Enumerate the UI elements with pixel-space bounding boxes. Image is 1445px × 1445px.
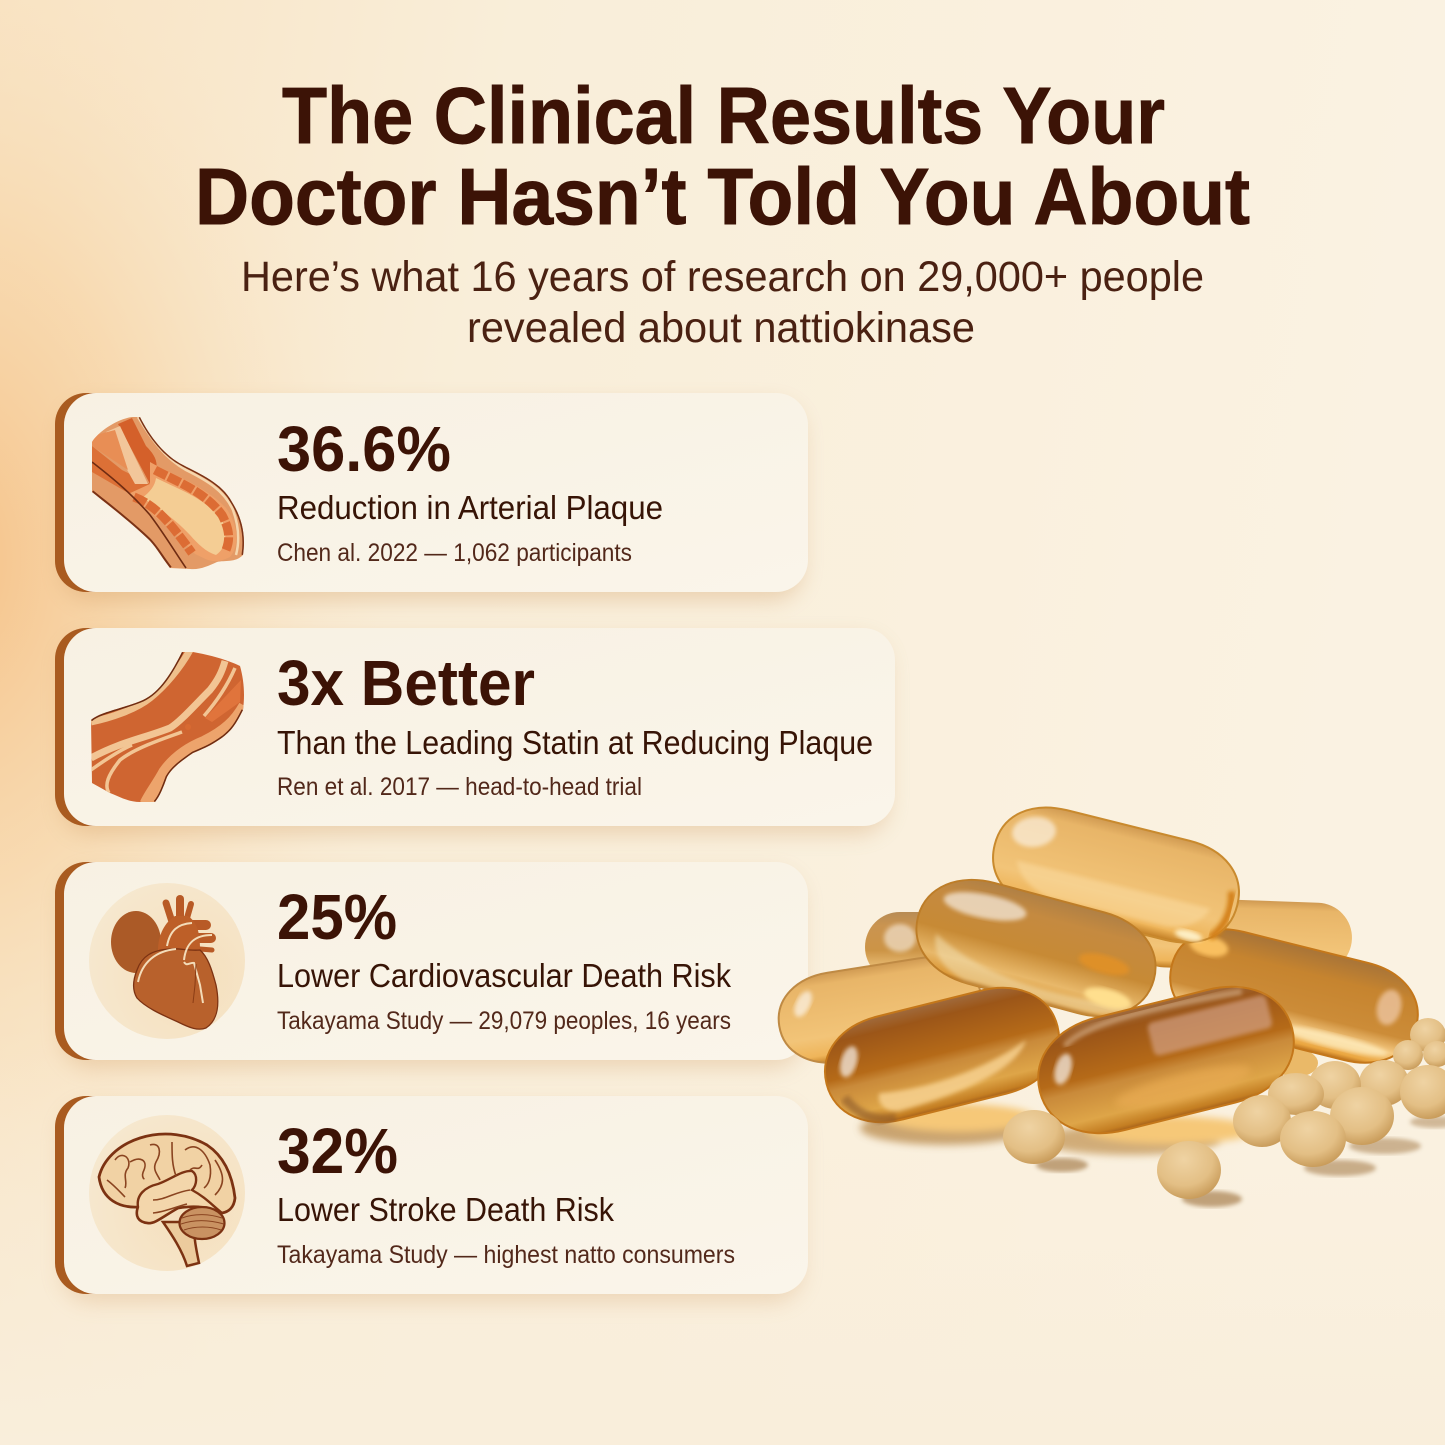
subtitle: Here’s what 16 years of research on 29,000+ people (241, 253, 1204, 301)
panel: comparison with statin stat card (55, 628, 895, 834)
citation: Chen al. 2022 — 1,062 participants (277, 539, 632, 567)
icon: artery segment (91, 652, 244, 802)
icon: artery cross-section with plaque (88, 413, 248, 573)
label: Reduction in Arterial Plaque (277, 489, 663, 526)
stat: 36.6%: 36.6% (277, 413, 451, 485)
middle capsule (905, 866, 1167, 1030)
stat: 32%: 32% (277, 1115, 398, 1187)
subtitle (241, 253, 1204, 352)
front right capsule (1026, 972, 1306, 1148)
soybeans (1003, 1018, 1445, 1199)
capsule shadows (860, 1104, 1445, 1207)
panel: arterial plaque stat card (55, 393, 808, 600)
front left capsule (814, 975, 1070, 1135)
icon: brain (89, 1115, 245, 1271)
panel: stroke death risk stat card (55, 1096, 808, 1302)
title: The Clinical Results Your (282, 71, 1165, 160)
label: Lower Cardiovascular Death Risk (277, 957, 731, 994)
subtitle: revealed about nattiokinase (467, 304, 975, 352)
bean behind right capsule (1274, 1049, 1318, 1077)
right capsule (1160, 917, 1428, 1075)
citation: Takayama Study — highest natto consumers (277, 1241, 735, 1269)
icon: heart (89, 883, 245, 1039)
citation: Ren et al. 2017 — head-to-head trial (277, 773, 642, 801)
image: softgel capsules and soybeans (772, 795, 1445, 1207)
stat: 25%: 25% (277, 881, 397, 953)
back capsules (865, 896, 1353, 982)
citation: Takayama Study — 29,079 peoples, 16 years (277, 1007, 731, 1035)
left capsule (772, 950, 988, 1070)
top capsule (982, 795, 1250, 955)
label: Than the Leading Statin at Reducing Plaque (277, 724, 873, 761)
title (195, 71, 1250, 241)
title: Doctor Hasn’t Told You About (195, 152, 1250, 241)
label: Lower Stroke Death Risk (277, 1191, 614, 1228)
stat: 3x Better: 3x Better (277, 647, 535, 719)
panel: cardiovascular death risk stat card (55, 862, 808, 1068)
